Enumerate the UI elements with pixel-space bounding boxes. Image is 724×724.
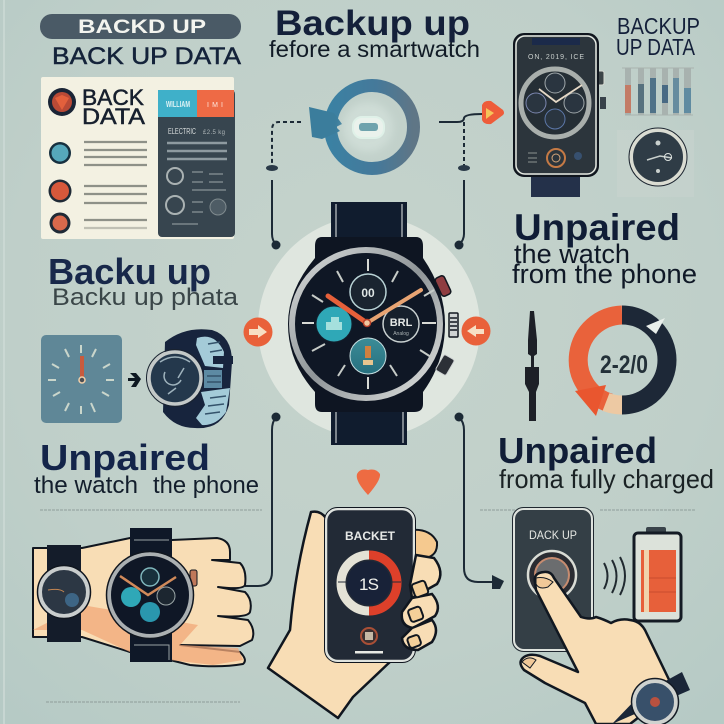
backup button xyxy=(528,551,576,599)
text block: unpaired the watch the phone: Unpaired xyxy=(40,437,210,478)
phone xyxy=(324,508,416,662)
dark side panel xyxy=(158,90,235,237)
watch straps xyxy=(331,202,407,445)
icon: clock panel xyxy=(41,335,122,423)
icon: battery xyxy=(634,527,681,621)
panel: back up data heading pill xyxy=(40,14,241,39)
phone strap xyxy=(531,172,580,197)
card text lines xyxy=(84,142,147,228)
text block: unpaired the watch from the phone: from the phone xyxy=(512,259,697,289)
text block: backu up xyxy=(48,251,239,311)
panel: central smartwatch xyxy=(244,202,490,445)
dashed divider lines xyxy=(40,510,695,702)
screen label: DACK UP xyxy=(529,528,577,542)
dark side panel: I M I xyxy=(207,102,223,109)
phone bottom icons xyxy=(528,149,582,167)
dark side panel: £2.5 kg xyxy=(203,130,225,136)
phone icon xyxy=(361,628,377,644)
icon: circular sync arrow xyxy=(309,86,414,168)
text block: unpaired from a fully charged: Unpaired xyxy=(498,430,657,471)
illustration: wrist with two watches xyxy=(33,528,253,666)
arrow: right orange xyxy=(462,316,490,346)
heading: backup up data: UP DATA xyxy=(616,34,696,60)
small watch xyxy=(38,545,90,642)
heading: back up data: BACK UP DATA xyxy=(52,43,242,70)
phone watch face xyxy=(521,69,589,137)
arrow: left orange xyxy=(244,318,272,346)
icon: side-view watch xyxy=(146,329,233,428)
connector lines xyxy=(245,114,494,586)
phone buttons xyxy=(596,71,606,109)
watch hands xyxy=(328,290,421,326)
panel: backup document card xyxy=(41,77,235,239)
card title: DATA xyxy=(82,104,145,129)
text block: unpaired from a fully charged xyxy=(498,430,714,494)
light backdrop circle xyxy=(258,216,480,438)
wrist watch xyxy=(612,672,690,724)
illustration: hand holding phone xyxy=(268,508,440,718)
chart: circular charge gauge: 2-2/0 xyxy=(600,351,648,379)
illustration: pointing hand xyxy=(520,572,690,724)
phone xyxy=(514,509,592,650)
arrow: lower right connector head xyxy=(492,575,504,589)
icon: charging cable xyxy=(525,311,539,421)
subdials: 00 xyxy=(361,286,375,300)
subdials xyxy=(316,274,419,374)
text block: unpaired the watch from the phone xyxy=(512,207,697,289)
large watch xyxy=(106,528,197,662)
icon: round watch dial xyxy=(617,128,694,197)
panel: phone with watch face: ON, 2019, ICE xyxy=(528,54,584,61)
text block: unpaired the watch the phone xyxy=(34,437,259,499)
watch buttons xyxy=(434,275,458,376)
subdials: Analog xyxy=(393,331,409,337)
phone body xyxy=(514,34,598,176)
heading: backup up data xyxy=(616,13,700,60)
card icons xyxy=(48,142,72,234)
icon: heart badge xyxy=(48,88,76,116)
marker: orange pin xyxy=(357,470,380,495)
phone gauge: 1S xyxy=(359,575,379,594)
panel: back up data heading pill: BACKD UP xyxy=(78,17,206,38)
palm xyxy=(268,512,392,718)
text block: backu up: Backu up phata xyxy=(52,284,239,311)
text block: unpaired from a fully charged: froma fully charged xyxy=(499,464,714,494)
arrow: orange top right xyxy=(482,101,504,124)
text block: unpaired the watch the phone: the watch xyxy=(34,472,138,499)
arm and fist xyxy=(33,538,253,666)
fingers xyxy=(402,555,440,650)
silver bezel xyxy=(292,250,440,398)
dark side panel: ELECTRIC xyxy=(168,127,196,136)
watch case xyxy=(288,237,445,412)
phone screen title: BACKET xyxy=(345,529,396,543)
text block: unpaired the watch from the phone: Unpaired xyxy=(514,207,680,248)
dark side panel: WILLIAM xyxy=(166,100,190,109)
dial ticks xyxy=(302,259,436,389)
card title: BACK xyxy=(82,85,144,110)
heading: backup up: Backup up xyxy=(275,4,470,43)
card title xyxy=(82,85,145,129)
back finger xyxy=(410,530,437,558)
text block: unpaired the watch the phone: the phone xyxy=(153,472,259,499)
icon: signal waves xyxy=(604,557,625,595)
text block: unpaired the watch from the phone: the watch xyxy=(514,239,630,269)
panel: phone with watch face xyxy=(514,34,606,197)
heading: backup up data: BACKUP xyxy=(617,13,700,39)
text block: backu up: Backu up xyxy=(48,251,211,292)
subheading: before a smartwatch: fefore a smartwatch xyxy=(269,36,480,62)
chart: circular charge gauge xyxy=(575,315,667,416)
phone gauge xyxy=(338,555,401,611)
bar chart xyxy=(622,68,694,115)
subdials: BRL xyxy=(390,317,413,329)
arrow: clock to watch xyxy=(128,373,141,387)
panel: phone tap backup xyxy=(512,508,594,652)
